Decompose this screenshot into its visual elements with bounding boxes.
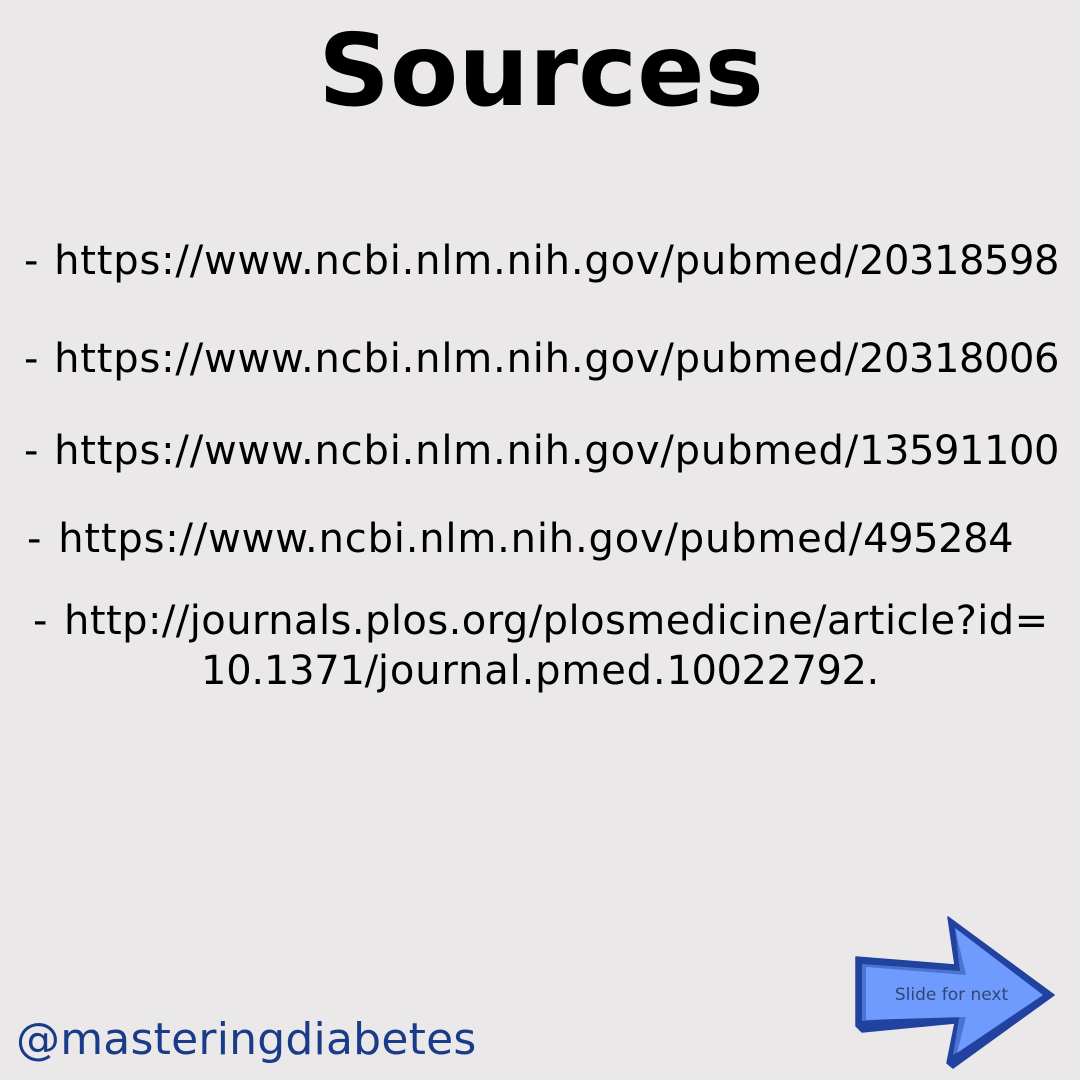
source link 5: 10.1371/journal.pmed.10022792. — [201, 648, 879, 694]
source link 4: - https://www.ncbi.nlm.nih.gov/pubmed/495284 — [27, 516, 1013, 562]
arrow: slide for next — [855, 916, 1055, 1069]
title: Sources — [318, 14, 764, 129]
source link 5 — [33, 598, 1049, 694]
source link 3: - https://www.ncbi.nlm.nih.gov/pubmed/13591100 — [24, 428, 1059, 474]
arrow: slide for next: Slide for next — [895, 985, 1008, 1005]
source link 5: - http://journals.plos.org/plosmedicine/article?id= — [33, 598, 1049, 644]
source link 1: - https://www.ncbi.nlm.nih.gov/pubmed/20318598 — [24, 238, 1059, 284]
source link 2: - https://www.ncbi.nlm.nih.gov/pubmed/20318006 — [24, 336, 1059, 382]
handle: @masteringdiabetes — [16, 1014, 477, 1065]
